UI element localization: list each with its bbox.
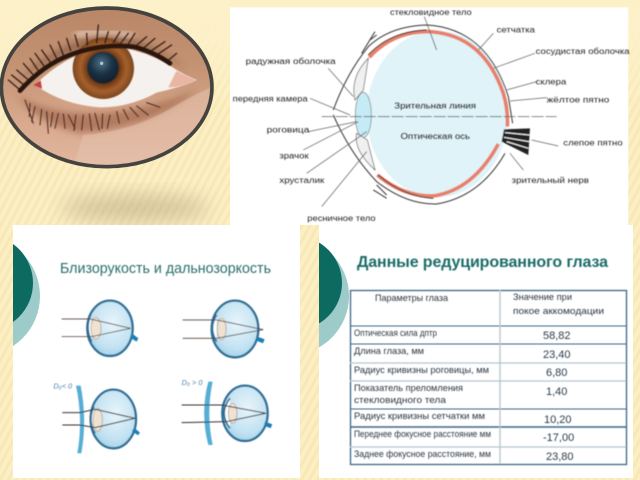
optic nerve: [502, 128, 530, 155]
diagram labels: радужная оболочка: [246, 57, 336, 66]
panel: myopia and hyperopia slide: [0, 225, 300, 478]
diagram labels: [233, 8, 630, 223]
table text: Параметры глаза: [375, 293, 448, 303]
table text: Радиус кривизны роговицы, мм: [354, 365, 489, 375]
panel: eye anatomy diagram: [230, 7, 630, 225]
eye: myopia uncorrected: [62, 301, 138, 356]
table text: Заднее фокусное расстояние, мм: [354, 449, 491, 459]
table text: 23,40: [543, 349, 571, 361]
eye: hyperopia corrected with converging lens: D₀ > 0: [182, 378, 203, 387]
eye: hyperopia corrected with converging lens: [182, 378, 272, 445]
sclera outline: [333, 25, 513, 204]
table text: Оптическая сила дптр: [354, 328, 437, 338]
ciliary body and iris: [354, 58, 375, 170]
table text: 10,20: [544, 414, 572, 426]
data table: [350, 290, 626, 464]
decorative circle: light teal: [319, 256, 349, 348]
diagram labels: склера: [536, 77, 567, 86]
table text: -17,00: [543, 432, 574, 444]
decorative circle: dark teal: [319, 242, 342, 324]
upper lid and lashes: [8, 25, 177, 91]
diagram labels: стекловидное тело: [390, 8, 472, 17]
table text: Переднее фокусное расстояние мм: [354, 429, 491, 439]
lens: [355, 92, 371, 138]
diagram labels: Зрительная линия: [394, 102, 476, 111]
table text: Радиус кривизны сетчатки мм: [354, 411, 485, 421]
diagram labels: жёлтое пятно: [547, 96, 610, 105]
heading: myopia and hyperopia: Близорукость и дальнозоркость: [60, 261, 271, 277]
diagram labels: хрусталик: [279, 176, 325, 185]
table text: 6,80: [546, 367, 567, 379]
table text: покое аккомодации: [513, 306, 604, 316]
table text: Значение при: [513, 292, 572, 302]
eye white: [35, 47, 197, 107]
panel: reduced eye data slide: [319, 225, 633, 478]
pupil: [87, 52, 119, 83]
retina layer: [369, 32, 507, 127]
table text: 1,40: [546, 386, 567, 398]
diagram labels: передняя камера: [233, 95, 308, 104]
table text: Показатель преломления: [354, 383, 463, 393]
diagram labels: зрительный нерв: [512, 176, 589, 185]
diagram labels: ресничное тело: [307, 214, 376, 223]
diagram labels: роговица: [267, 126, 310, 135]
optical axis and leader lines: [303, 17, 558, 207]
table grid: [350, 290, 626, 464]
diagram labels: сосудистая оболочка: [536, 47, 630, 56]
eye: myopia corrected with diverging lens: D₀< 0: [53, 381, 73, 390]
table text: Длина глаза, мм: [354, 346, 424, 356]
decorative circle: dark teal: [13, 244, 33, 322]
eye: myopia corrected with diverging lens: [53, 381, 140, 453]
table text: [354, 292, 604, 463]
diagram labels: слепое пятно: [563, 139, 623, 148]
table text: 58,82: [543, 330, 571, 342]
eye: hyperopia uncorrected: [183, 301, 265, 357]
lower lashes: [25, 100, 160, 133]
eye diagrams: [53, 301, 272, 453]
diagram labels: сетчатка: [497, 26, 536, 35]
diagram labels: зрачок: [279, 152, 309, 161]
globe interior: [367, 31, 508, 197]
decorative circle: light teal: [13, 256, 40, 346]
iris: [73, 38, 134, 99]
heading: reduced eye data: Данные редуцированного глаза: [357, 254, 608, 271]
table text: 23,80: [546, 451, 574, 463]
diagram labels: Оптическая ось: [401, 132, 470, 141]
table text: стекловидного тела: [354, 395, 446, 405]
lower lid shading: [17, 90, 197, 133]
photo of a brown eye in an oval frame: [1, 8, 213, 167]
